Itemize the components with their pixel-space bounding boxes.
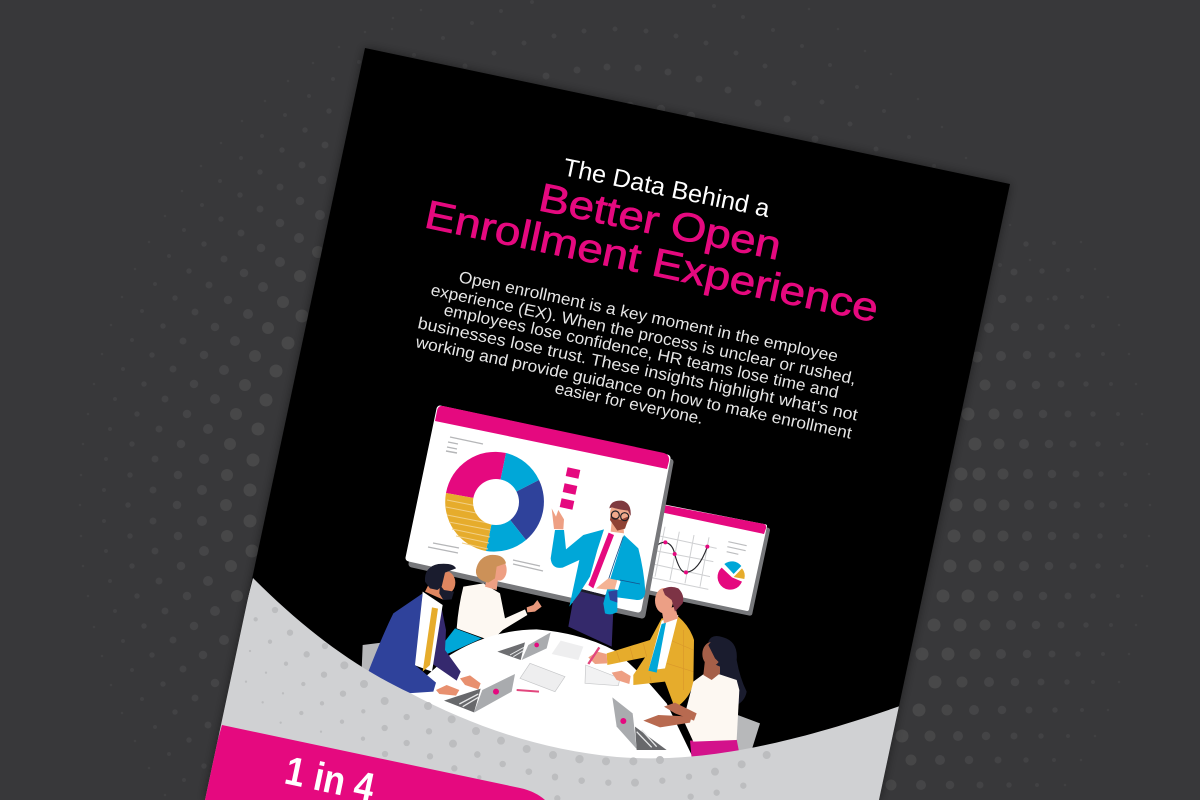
donut chart bbox=[445, 452, 544, 552]
intro paragraph: businesses lose trust. These insights highlight what's not bbox=[416, 314, 860, 425]
intro paragraph: employees lose confidence, HR teams lose time and bbox=[442, 301, 840, 402]
line chart curve bbox=[658, 540, 710, 574]
meeting table and seated team bbox=[362, 555, 760, 763]
intro paragraph: Open enrollment is a key moment in the employee bbox=[457, 268, 840, 366]
title intro line: The Data Behind a bbox=[561, 153, 772, 223]
presenter bbox=[551, 501, 645, 647]
grey wave panel bbox=[195, 578, 900, 800]
tilted poster page bbox=[205, 48, 1010, 800]
chairs bbox=[362, 643, 760, 753]
woman with blonde hair bbox=[443, 555, 542, 655]
papers and pen bbox=[517, 641, 620, 692]
laptop: front right bbox=[612, 697, 667, 750]
small pie chart bbox=[718, 561, 745, 590]
intro paragraph: working and provide guidance on how to make enrollment bbox=[413, 333, 854, 443]
dotted pattern on wave bbox=[246, 610, 582, 781]
small presentation board with line chart bbox=[637, 504, 768, 613]
legend swatches bbox=[560, 467, 580, 510]
woman in white blouse bbox=[643, 636, 747, 758]
title bbox=[426, 158, 876, 321]
man in navy suit bbox=[368, 564, 481, 696]
man in yellow jacket bbox=[588, 587, 694, 708]
intro paragraph bbox=[413, 268, 860, 443]
intro paragraph: easier for everyone. bbox=[553, 379, 705, 428]
poster contents bbox=[195, 153, 900, 800]
main presentation board with donut chart bbox=[409, 406, 670, 615]
pink stat banner bbox=[200, 725, 548, 800]
table top bbox=[407, 629, 693, 763]
title highlight line one: Better Open bbox=[535, 176, 785, 269]
title highlight line two: Enrollment Experience bbox=[421, 193, 882, 331]
laptop: back bbox=[497, 632, 551, 660]
laptop: front left bbox=[444, 674, 515, 713]
intro paragraph: experience (EX). When the process is unclear or rushed, bbox=[429, 281, 858, 388]
